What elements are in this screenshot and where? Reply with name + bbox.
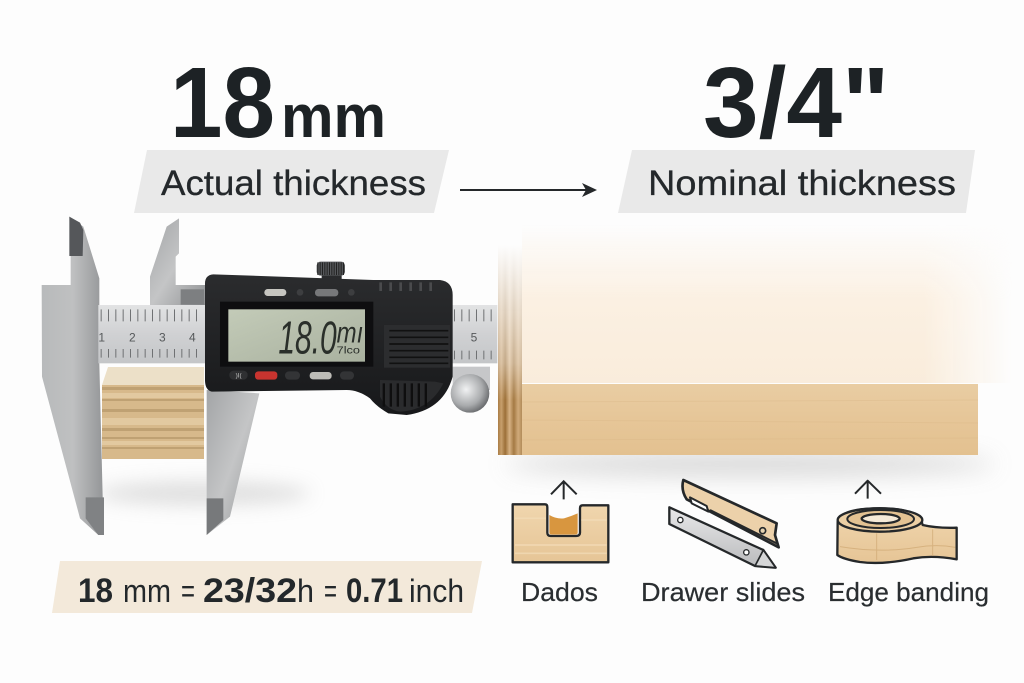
label: actual thickness: Actual thickness — [161, 164, 426, 203]
main scale: 5 — [471, 330, 478, 344]
plywood board — [498, 225, 1012, 476]
slide holes — [678, 517, 683, 523]
callout: conversion: = — [181, 573, 195, 609]
plywood sample in caliper — [102, 367, 204, 459]
callout: conversion: 18 — [78, 572, 113, 610]
caliper shadow — [97, 481, 310, 505]
icon: edge banding — [837, 481, 957, 563]
slide screw — [760, 528, 766, 534]
speaker grille — [384, 325, 450, 368]
banding arrow — [855, 481, 881, 499]
grip ridges top — [379, 274, 433, 300]
callout: conversion: 0.71 — [346, 572, 403, 610]
dado wood grain — [515, 518, 607, 553]
upper jaw inner edge — [69, 217, 83, 256]
dado arrow — [551, 481, 577, 499]
heading: 3/4 inch: 3/4" — [703, 47, 889, 159]
main scale: 2 — [129, 330, 136, 344]
jaw tip — [86, 497, 104, 535]
label: nominal thickness: Nominal thickness — [648, 164, 956, 203]
label: nominal thickness — [618, 150, 975, 213]
callout: conversion: = — [324, 573, 337, 609]
heading: 18 mm: 18 — [170, 47, 275, 159]
icon: dados — [513, 481, 608, 562]
main scale: 1 — [98, 330, 105, 344]
roll side — [837, 508, 957, 563]
callout: conversion: h — [297, 573, 314, 609]
lower buttons: )I( — [236, 373, 243, 380]
lower jaw tip — [207, 498, 223, 535]
LCD screen: 18.0 — [278, 311, 337, 363]
callout: conversion: mm — [123, 573, 171, 609]
upper slide — [683, 480, 779, 547]
lower slide — [669, 507, 776, 568]
roll inner ring — [847, 510, 914, 528]
label: edge banding: Edge banding — [828, 577, 989, 607]
upper moving jaw — [150, 218, 205, 307]
slide end — [755, 550, 776, 568]
dado groove — [549, 513, 578, 535]
callout: conversion: 23/32 — [203, 572, 297, 610]
top buttons — [264, 289, 355, 296]
fixed jaw — [42, 217, 104, 535]
arrow: actual to nominal — [460, 183, 597, 197]
callout: conversion — [52, 561, 482, 613]
caliper body — [205, 274, 453, 415]
label: dados: Dados — [521, 577, 598, 607]
top knob — [317, 262, 345, 282]
LCD screen: 7lco — [337, 345, 361, 356]
thumb grip — [380, 380, 443, 412]
LCD screen — [220, 302, 373, 367]
main scale: 4 — [189, 330, 196, 344]
label: drawer slides: Drawer slides — [641, 577, 805, 607]
slider window — [181, 289, 204, 305]
thumb roller — [451, 367, 490, 413]
heading: 18 mm: mm — [281, 83, 386, 150]
dado board — [513, 504, 608, 562]
roll center — [862, 514, 900, 523]
heading: 18 mm — [170, 47, 386, 159]
main scale — [98, 305, 497, 363]
roll top — [838, 508, 922, 532]
digital caliper — [42, 217, 497, 535]
banding grain — [840, 529, 955, 560]
icon: drawer slides — [669, 480, 779, 568]
LCD screen: mı — [337, 317, 363, 350]
lower buttons — [229, 371, 354, 380]
main scale: 3 — [159, 330, 166, 344]
callout: conversion: inch — [409, 573, 464, 609]
slide channel — [690, 497, 777, 543]
label: actual thickness — [134, 150, 449, 213]
lower moving jaw — [207, 390, 259, 535]
